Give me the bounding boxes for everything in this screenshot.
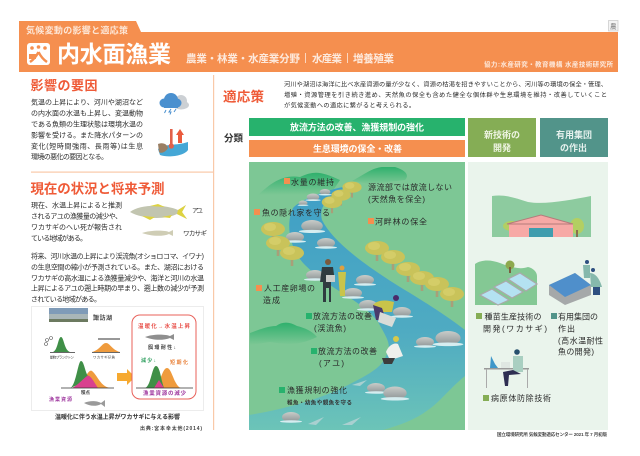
panel: technology and strains	[468, 162, 608, 430]
text block: current: ている地域がある。	[31, 234, 87, 242]
small curve: wakasagi fry: ワカサギ仔魚	[93, 354, 116, 360]
label: headwaters: (天然魚を保全)	[368, 194, 425, 204]
river	[249, 186, 465, 430]
label: useful strains	[551, 312, 603, 356]
chart: effect of warming on wakasagi	[32, 306, 204, 410]
label: stocking stream fish	[306, 311, 372, 333]
label: artificial spawning ground: 造成	[263, 295, 280, 305]
text block: forecast: ワカサギの高水温による漁獲量減少や、海洋と河川の水温	[31, 274, 204, 282]
text block: causes: の内水面の水温も上昇し、変温動物	[31, 108, 143, 118]
title: 内水面漁業	[57, 41, 171, 67]
label: classification: 分類	[224, 132, 243, 144]
text block: causes: 影響を受ける。また降水パターンの	[31, 130, 143, 140]
large curve: before warming: 漁業資源	[49, 396, 72, 403]
callout: after warming: 短期化	[170, 359, 188, 366]
label: seed production: 開発(ワカサギ)	[483, 324, 547, 334]
label: useful strains: 魚の開発)	[558, 346, 594, 356]
text block: adaptation intro: 河川や湖沼は海洋に比べ水産資源の量が少なく、資源の枯渇を招きやすいことから、河川等の環境の保全・管理、	[284, 80, 607, 88]
corner tag: 農	[610, 22, 617, 30]
label: catch regulation: 稚魚・幼魚や親魚を守る	[287, 398, 352, 406]
category: useful strains	[540, 118, 608, 157]
label: stocking stream fish: (渓流魚)	[314, 323, 346, 333]
corner tag	[608, 20, 618, 31]
text block: forecast: 将来、河川水温の上昇により渓流魚(オショロコマ、イワナ)	[31, 252, 204, 260]
text block: current: ワカサギのへい死が報告され	[31, 222, 122, 232]
text block: current: されるアユの漁獲量の減少や、	[31, 212, 122, 220]
text block: causes	[31, 98, 143, 161]
label: disease control: 病原体防除技術	[491, 393, 551, 403]
label: stocking ayu	[311, 346, 377, 368]
mountains	[250, 167, 407, 345]
illustration: fish ponds	[475, 260, 537, 305]
rocks	[280, 189, 463, 423]
illustration: research building	[492, 195, 591, 237]
category: new technology: 新技術の	[484, 129, 520, 140]
people working in river	[320, 259, 403, 364]
text block: causes: 気温の上昇により、河川や湖沼など	[31, 98, 143, 106]
category: habitat conservation	[249, 140, 465, 157]
trees	[261, 182, 464, 307]
label: catch regulation	[279, 385, 352, 406]
callout: after warming: 餌環耐性↓	[148, 344, 176, 351]
label: riverside forest: 河畔林の保全	[375, 216, 427, 226]
illustration: tank with researchers	[549, 260, 602, 305]
label: artificial spawning ground	[256, 283, 315, 305]
icon: rain cloud	[160, 93, 189, 114]
sector subtitle: 水産業	[312, 52, 342, 65]
header banner	[19, 21, 618, 72]
heading: causes: 影響の要因	[30, 78, 98, 93]
fish silhouettes	[308, 380, 367, 425]
text block: forecast: されている地域がある。	[31, 294, 101, 304]
label: stocking ayu: (アユ)	[319, 359, 344, 368]
callout: after warming: 漁業資源の減少	[143, 389, 186, 397]
label: seed production: 種苗生産技術の	[484, 312, 542, 322]
icon: wakasagi fish	[142, 230, 173, 236]
label: catch regulation: 漁獲規制の強化	[287, 385, 347, 395]
label: ayu: アユ	[192, 206, 203, 214]
category: stocking and regulation: 放流方法の改善、漁獲規制の強化	[290, 122, 424, 132]
text block: causes: 変化(短時間強雨、長雨等)は生息	[31, 142, 143, 150]
label: headwaters: 源流部では放流しない	[368, 182, 452, 192]
text block: adaptation intro	[284, 80, 607, 110]
footer credit: 国立環境研究所 気候変動適応センター 2021 年 7 月初版	[497, 431, 608, 438]
caption: figure: 温暖化に伴う水温上昇がワカサギに与える影響	[55, 413, 180, 421]
label: artificial spawning ground: 人工産卵場の	[264, 283, 315, 293]
label: stocking ayu: 放流方法の改善	[318, 346, 377, 356]
panel: current status and forecast	[30, 180, 208, 304]
text block: adaptation intro: が気候変動への適応に繋がると考えられる。	[284, 102, 415, 110]
icon: fishery emblem	[27, 43, 50, 65]
category: new technology: 開発	[493, 142, 511, 153]
text block: forecast: の生息空間の縮小が予測されている。また、湖沼における	[31, 262, 204, 272]
panel: causes of impact	[30, 78, 189, 161]
category: useful strains: の作出	[560, 142, 587, 153]
large curve: before warming: 積点	[81, 389, 90, 396]
label: useful strains: 作出	[558, 324, 575, 334]
text block: causes: 環境の悪化の要因となる。	[31, 152, 108, 161]
label: wakasagi: ワカサギ	[183, 230, 208, 238]
icon: ayu fish	[130, 204, 187, 220]
category: useful strains: 有用集団	[556, 129, 592, 140]
small curve: plankton: 動物プランクトン	[50, 354, 74, 360]
text block: forecast: 上昇によるアユの遡上時期の早まり、遡上数の減少が予測	[31, 284, 204, 292]
label: headwaters	[368, 182, 452, 204]
header tab label: 気候変動の影響と適応策	[26, 24, 128, 36]
text block: current: 現在、水温上昇によると推測	[31, 200, 122, 210]
sector subtitle: 農業・林業・水産業分野	[186, 52, 300, 65]
panel: river illustration	[249, 162, 465, 430]
icon: thermometer and water	[158, 129, 188, 156]
cooperation credit: 協力:水産研究・教育機構 水産技術研究所	[484, 60, 614, 68]
source note: 出典:宮本幸太他(2014)	[140, 425, 202, 432]
category: habitat conservation: 生息環境の保全・改善	[313, 143, 402, 154]
sector subtitle: 増養殖業	[353, 52, 394, 65]
text block: causes: である魚類の生理状態は環境水温の	[31, 120, 143, 128]
label: stocking stream fish: 放流方法の改善	[313, 311, 372, 321]
small curve: wakasagi fry	[92, 339, 120, 360]
sector subtitle	[186, 52, 394, 65]
text block: forecast	[31, 252, 204, 304]
arrow: transition	[117, 369, 135, 385]
large curve: before warming	[49, 361, 114, 407]
heading: status: 現在の状況と将来予測	[30, 180, 164, 196]
label: seed production	[476, 312, 547, 334]
small curve: plankton	[44, 336, 75, 360]
text block: adaptation intro: 増殖・資源管理を引き続き進め、天然魚の保全も含めた健全な個体群や生息環境を維持・改善していくこと	[284, 91, 607, 99]
heading: adaptation: 適応策	[223, 88, 264, 104]
callout: after warming	[132, 315, 196, 399]
category: new technology	[468, 118, 536, 157]
illustration: laboratory	[484, 349, 529, 388]
category: stocking and regulation	[249, 118, 465, 136]
label: fish shelter: 魚の隠れ家を守る	[262, 208, 330, 218]
label: useful strains: (高水温耐性	[558, 336, 603, 346]
callout: after warming: 温暖化→水温上昇	[138, 322, 190, 330]
text block: current	[31, 200, 122, 242]
label: water flow: 水量の維持	[291, 177, 334, 187]
label: Lake Suwa: 諏訪湖	[93, 314, 112, 322]
callout: after warming: 減少↓	[141, 357, 156, 364]
photo: Lake Suwa	[49, 308, 88, 322]
label: useful strains: 有用集団の	[558, 312, 598, 322]
